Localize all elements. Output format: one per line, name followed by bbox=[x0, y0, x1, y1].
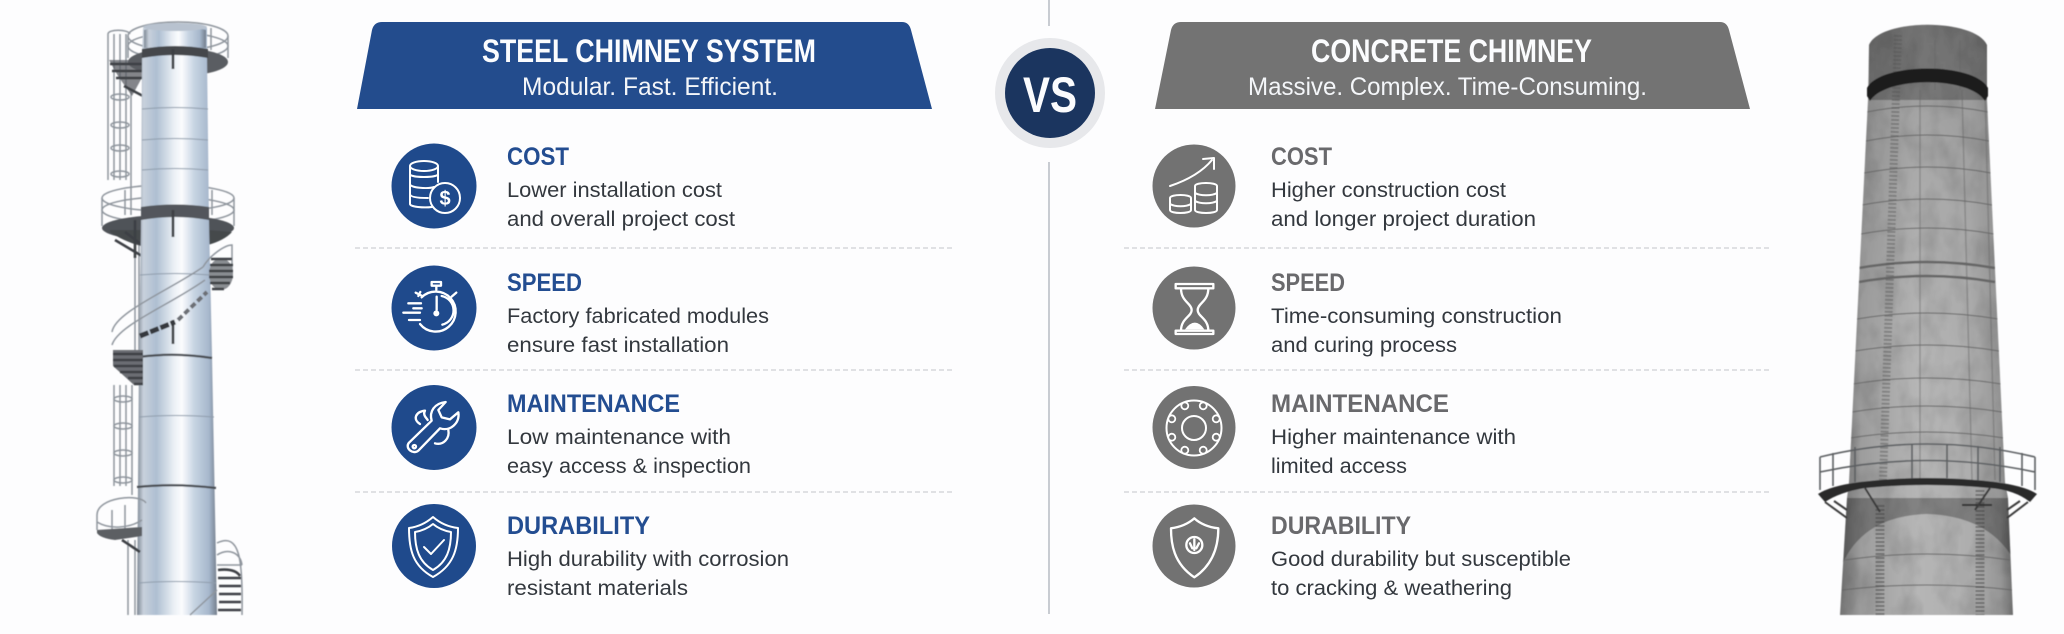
text: concrete speed: SPEED bbox=[1271, 269, 1345, 297]
row: durability bbox=[1152, 504, 1571, 600]
banner: steel chimney system: STEEL CHIMNEY SYSTEM bbox=[482, 33, 816, 69]
panel: steel chimney system bbox=[355, 22, 955, 600]
row: maintenance bbox=[1152, 386, 1516, 478]
top band bbox=[1867, 68, 1988, 101]
banner: concrete chimney bbox=[1155, 22, 1750, 109]
text: steel maintenance bbox=[507, 390, 751, 478]
text: steel cost: and overall project cost bbox=[507, 207, 735, 231]
bottom right stair bbox=[190, 541, 242, 615]
text: concrete cost: Higher construction cost bbox=[1271, 178, 1506, 202]
banner: steel chimney system bbox=[357, 22, 932, 109]
banner: steel chimney system: Modular. Fast. Efficient. bbox=[522, 73, 778, 101]
text: steel cost bbox=[507, 143, 735, 231]
icon: coins and dollar: $ bbox=[439, 188, 451, 210]
banner: concrete chimney: Massive. Complex. Time-Consuming. bbox=[1248, 73, 1647, 101]
text: concrete maintenance: limited access bbox=[1271, 454, 1407, 478]
lower platform bbox=[97, 498, 146, 615]
cage ladder upper bbox=[108, 30, 139, 352]
top platform bbox=[109, 22, 228, 96]
text: concrete maintenance: Higher maintenance with bbox=[1271, 425, 1516, 449]
text: concrete maintenance bbox=[1271, 390, 1516, 478]
banner: concrete chimney: CONCRETE CHIMNEY bbox=[1311, 33, 1592, 69]
text: steel speed bbox=[507, 269, 769, 357]
row: speed bbox=[1152, 266, 1562, 357]
text: steel durability: DURABILITY bbox=[507, 512, 650, 540]
text: steel speed: ensure fast installation bbox=[507, 333, 729, 357]
text: concrete durability: Good durability but susceptible bbox=[1271, 547, 1571, 571]
row: maintenance bbox=[392, 385, 751, 478]
icon: rising arrow and coins bbox=[1152, 144, 1236, 228]
row: durability bbox=[392, 504, 789, 600]
lower cage ladder bbox=[114, 385, 132, 495]
shaft bbox=[137, 23, 217, 615]
text: concrete durability bbox=[1271, 512, 1571, 600]
text: steel durability: resistant materials bbox=[507, 576, 688, 600]
icon: gear bbox=[1152, 386, 1236, 469]
text: steel maintenance: easy access & inspection bbox=[507, 454, 751, 478]
VS badge bbox=[995, 38, 1105, 148]
text: concrete cost bbox=[1271, 143, 1536, 231]
platform bbox=[1818, 478, 2037, 502]
text: concrete maintenance: MAINTENANCE bbox=[1271, 390, 1449, 418]
text: concrete cost: and longer project duration bbox=[1271, 207, 1536, 231]
shaft bbox=[1835, 20, 2020, 620]
VS badge: VS bbox=[1023, 67, 1077, 123]
text: concrete cost: COST bbox=[1271, 143, 1332, 171]
railing bbox=[1820, 444, 2035, 490]
icon: hourglass bbox=[1152, 266, 1236, 350]
text: steel durability bbox=[507, 512, 789, 600]
text: steel maintenance: MAINTENANCE bbox=[507, 390, 680, 418]
icon: stopwatch bbox=[392, 266, 476, 350]
illustration: steel chimney bbox=[97, 22, 242, 615]
icon: shield with check bbox=[392, 504, 476, 588]
row: speed bbox=[392, 266, 769, 357]
row: cost bbox=[1152, 143, 1536, 231]
illustration: concrete chimney bbox=[1818, 20, 2037, 620]
text: steel speed: SPEED bbox=[507, 269, 582, 297]
icon: coins and dollar bbox=[392, 144, 476, 228]
text: concrete speed: and curing process bbox=[1271, 333, 1457, 357]
panel: concrete chimney bbox=[1124, 22, 1770, 600]
center divider line bbox=[1048, 0, 1050, 614]
middle platform rails bbox=[102, 185, 234, 258]
text: concrete durability: to cracking & weathering bbox=[1271, 576, 1512, 600]
text: steel maintenance: Low maintenance with bbox=[507, 425, 731, 449]
text: steel durability: High durability with corrosion bbox=[507, 547, 789, 571]
text: concrete speed bbox=[1271, 269, 1562, 357]
text: steel cost: Lower installation cost bbox=[507, 178, 722, 202]
row: cost bbox=[392, 143, 735, 231]
text: concrete durability: DURABILITY bbox=[1271, 512, 1411, 540]
text: steel speed: Factory fabricated modules bbox=[507, 304, 769, 328]
spiral stair bbox=[112, 245, 233, 385]
text: steel cost: COST bbox=[507, 143, 569, 171]
text: concrete speed: Time-consuming construction bbox=[1271, 304, 1562, 328]
icon: wrench and gear bbox=[392, 385, 476, 470]
upper cap and collars bbox=[137, 23, 216, 583]
icon: cracked shield bbox=[1152, 504, 1236, 588]
